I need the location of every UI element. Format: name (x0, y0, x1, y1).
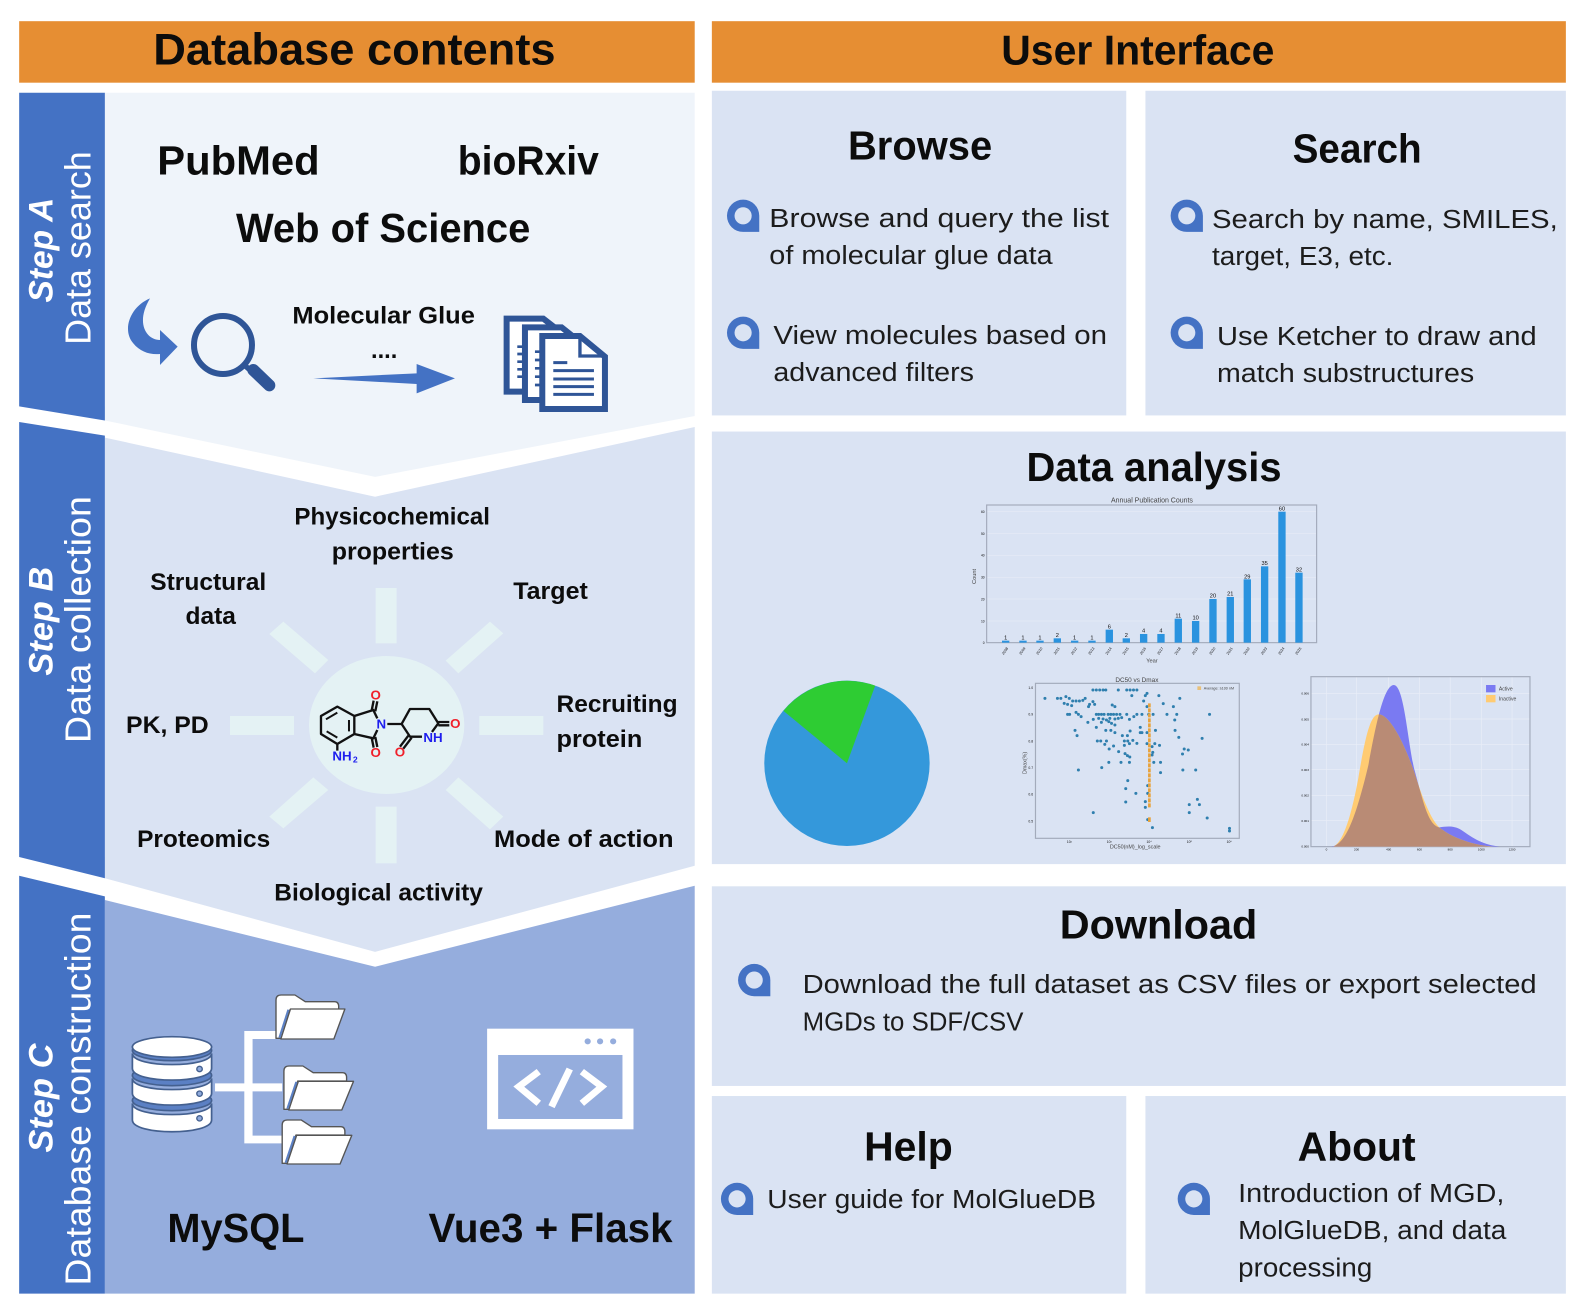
label: Physicochemical properties (294, 503, 490, 566)
icon: bullet (727, 200, 759, 232)
density plot: active vs inactive: Inactive (1499, 697, 1516, 703)
label: Vue3 + Flask: Vue3 + Flask (429, 1205, 673, 1251)
bar chart: annual publication counts: 2019 (1191, 647, 1199, 656)
density plot: active vs inactive: 400 (1386, 847, 1392, 851)
scatter plot: DC50 vs Dmax: 0.6 (1028, 793, 1033, 797)
scatter plot: DC50 vs Dmax: 10⁴ (1146, 840, 1152, 844)
scatter plot: DC50 vs Dmax: 0.7 (1028, 766, 1033, 770)
density plot: active vs inactive: 200 (1354, 847, 1359, 851)
bar chart: annual publication counts: 2009 (1019, 647, 1026, 656)
text: search by name (1212, 206, 1558, 271)
icon: magnifying glass (194, 316, 269, 385)
bar chart: annual publication counts: 2008 (1001, 647, 1009, 656)
bar chart: annual publication counts: 2022 (1243, 647, 1251, 656)
label: Structural data: Structural (150, 569, 266, 596)
scatter plot: DC50 vs Dmax (1022, 677, 1239, 850)
scatter plot: DC50 vs Dmax: 10² (1067, 840, 1073, 844)
arrow (313, 364, 455, 393)
heading: Search: Search (1293, 125, 1422, 171)
scatter plot: DC50 vs Dmax: DC50 vs Dmax (1115, 677, 1159, 684)
bar chart: annual publication counts: Count (972, 568, 978, 584)
panel: Data analysis (712, 432, 1566, 864)
bar chart: annual publication counts: 10 (981, 619, 985, 623)
scatter plot: DC50 vs Dmax: 1.0 (1028, 686, 1033, 690)
density plot: active vs inactive: 1000 (1478, 847, 1485, 851)
heading: Data analysis: Data analysis (1026, 444, 1282, 490)
label: Structural data (150, 569, 266, 630)
step B background (105, 427, 695, 952)
molecule: pomalidomide: N (376, 717, 386, 732)
density plot: active vs inactive: 0.003 (1301, 768, 1309, 772)
bar chart: annual publication counts: 2020 (1209, 647, 1216, 656)
bar chart: annual publication counts: 50 (981, 532, 985, 536)
text: Ketcher: match substructures (1217, 360, 1474, 388)
step A background (105, 93, 695, 477)
text: download description: MGDs to SDF/CSV (803, 1008, 1024, 1036)
step C side strip: Database construction (58, 913, 99, 1286)
database and web icons (132, 995, 633, 1164)
step C background (105, 886, 695, 1294)
keyword: Molecular Glue: Molecular Glue (292, 303, 475, 330)
label: Mode of action: Mode of action (494, 826, 674, 853)
text: download description: Download the full dataset as CSV files or export selected (803, 971, 1537, 999)
header: Database contents: Database contents (153, 26, 556, 75)
icon: folder middle (284, 1066, 353, 1110)
pie chart (764, 681, 930, 846)
scatter plot: DC50 vs Dmax: Dmax(%) (1022, 752, 1028, 774)
bar chart: annual publication counts: 29 (1244, 574, 1250, 580)
scatter plot: DC50 vs Dmax: 0.9 (1028, 713, 1033, 717)
step B side strip: Step B (22, 567, 60, 676)
rays (230, 588, 543, 863)
label: Target: Target (513, 578, 588, 605)
density plot: active vs inactive: 0.005 (1301, 717, 1309, 721)
scatter plot: DC50 vs Dmax: 10⁵ (1187, 840, 1192, 844)
central circle (309, 656, 464, 794)
panel: Step C database construction (19, 876, 695, 1294)
bar chart: annual publication counts: 2023 (1260, 647, 1268, 656)
scatter plot: DC50 vs Dmax: 10⁶ (1227, 840, 1232, 844)
radial diagram with molecule (230, 588, 543, 863)
bar chart: annual publication counts: Annual Publication Counts (1111, 498, 1193, 505)
label: Proteomics: Proteomics (137, 826, 270, 853)
bar chart: annual publication counts: 1 (1073, 635, 1076, 641)
density plot: active vs inactive: 0 (1326, 847, 1328, 851)
ellipsis: .... (371, 337, 397, 364)
molecule: pomalidomide: O (395, 744, 405, 759)
density plot: active vs inactive: 0.004 (1301, 743, 1309, 747)
density plot: active vs inactive: 600 (1417, 847, 1422, 851)
icon: folder top (276, 995, 345, 1039)
bar chart: annual publication counts: 4 (1142, 629, 1145, 635)
source: PubMed: PubMed (157, 137, 320, 183)
step B side strip: Data collection (58, 496, 99, 743)
bar chart: annual publication counts: 60 (1279, 506, 1285, 512)
icon: database (132, 1037, 212, 1132)
scatter plot: DC50 vs Dmax: 10³ (1107, 840, 1112, 844)
molecule: pomalidomide: NH (423, 730, 443, 745)
text: filters (773, 322, 1107, 387)
bar chart: annual publication counts (972, 498, 1317, 665)
molecule: pomalidomide: O (370, 688, 381, 703)
panel: Step B data collection (19, 422, 695, 952)
density plot: active vs inactive: 0.000 (1301, 844, 1309, 848)
label: Structural data: data (186, 603, 236, 630)
label: PK, PD: PK, PD (126, 712, 209, 739)
icon: bullet (1178, 1183, 1210, 1215)
bar chart: annual publication counts: 2021 (1226, 647, 1234, 656)
heading: Help: Help (864, 1124, 953, 1170)
header: Database contents (19, 21, 695, 83)
panel: Browse (712, 91, 1126, 415)
bar chart: annual publication counts: 32 (1296, 567, 1302, 573)
bar chart: annual publication counts: 40 (981, 554, 985, 558)
icon: bullet (721, 1183, 753, 1215)
text: about description: processing (1238, 1255, 1372, 1283)
density plot: active vs inactive: 800 (1448, 847, 1453, 851)
label: MySQL: MySQL (167, 1205, 305, 1251)
density plot: active vs inactive: 0.001 (1301, 819, 1309, 823)
header: User Interface: User Interface (1001, 28, 1274, 74)
density plot: active vs inactive: 1200 (1509, 847, 1516, 851)
source: bioRxiv: bioRxiv (458, 137, 599, 183)
panel: Search (1145, 91, 1566, 415)
bar chart: annual publication counts: 30 (981, 576, 985, 580)
bar chart: annual publication counts: 2011 (1053, 647, 1061, 655)
bar chart: annual publication counts: 2017 (1157, 647, 1164, 656)
bar chart: annual publication counts: 2018 (1174, 647, 1182, 656)
bar chart: annual publication counts: 21 (1227, 592, 1233, 598)
panel: Download (712, 886, 1566, 1086)
bar chart: annual publication counts: 1 (1038, 635, 1042, 641)
scatter plot: DC50 vs Dmax: Average: ≥100 nM (1204, 686, 1234, 690)
density plot: active vs inactive: 0.006 (1301, 692, 1309, 696)
panel: Help (712, 1096, 1126, 1294)
step A side strip: Step A (22, 198, 60, 302)
heading: About: About (1298, 1124, 1416, 1170)
text: filters: View molecules based on (773, 322, 1107, 350)
header: User Interface (712, 21, 1566, 83)
label: Physicochemical properties: properties (332, 539, 454, 566)
density plot: active vs inactive (1301, 677, 1530, 851)
step A side strip (19, 93, 105, 420)
bar chart: annual publication counts: 10 (1192, 616, 1199, 622)
bar chart: annual publication counts: 1 (1090, 635, 1094, 641)
text: user guide: User guide for MolGlueDB (767, 1186, 1096, 1214)
bar chart: annual publication counts: 60 (981, 510, 985, 514)
text: download description (803, 971, 1537, 1036)
text: browse list: Browse and query the list (769, 205, 1109, 233)
icon: curved arrow (128, 298, 178, 365)
label: Biological activity: Biological activity (274, 879, 484, 906)
molecule: pomalidomide: O (450, 716, 460, 731)
text: about description (1238, 1180, 1507, 1283)
bar chart: annual publication counts: 2013 (1088, 647, 1095, 656)
panel: Step A data search (19, 93, 695, 477)
bar chart: annual publication counts: 2024 (1277, 647, 1285, 656)
bar chart: annual publication counts: 20 (1210, 594, 1216, 600)
icon: bullet (1171, 200, 1203, 232)
text: about description: Introduction of MGD, (1238, 1180, 1504, 1208)
scatter plot: DC50 vs Dmax: 0.8 (1028, 739, 1033, 743)
step C side strip: Step C (22, 1042, 60, 1152)
bar chart: annual publication counts: Year (1146, 659, 1158, 665)
bar chart: annual publication counts: 2016 (1139, 647, 1147, 656)
bar chart: annual publication counts: 2025 (1294, 647, 1302, 656)
search icons and documents (128, 298, 605, 409)
step C side strip (19, 876, 105, 1294)
step A side strip: Data search (58, 151, 99, 345)
step B side strip (19, 422, 105, 878)
text: Ketcher (1217, 323, 1537, 388)
bar chart: annual publication counts: 1 (1021, 635, 1025, 641)
scatter plot: DC50 vs Dmax: 0.5 (1028, 819, 1033, 823)
source: Web of Science: Web of Science (236, 205, 530, 251)
molecule: pomalidomide: 2 (353, 755, 358, 765)
text: filters: advanced filters (773, 359, 974, 387)
icon: documents (507, 319, 605, 409)
bar chart: annual publication counts: 0 (983, 641, 985, 645)
icon: browser code window (487, 1029, 633, 1129)
bar chart: annual publication counts: 35 (1261, 561, 1268, 567)
molecule: pomalidomide: O (370, 745, 381, 760)
bar chart: annual publication counts: 20 (981, 597, 985, 601)
heading: Browse: Browse (848, 122, 992, 168)
bar chart: annual publication counts: 2010 (1036, 647, 1043, 656)
molecule: pomalidomide: NH (332, 749, 352, 764)
panel: About (1145, 1096, 1566, 1294)
bar chart: annual publication counts: 2015 (1122, 647, 1130, 656)
bar chart: annual publication counts: 2 (1056, 633, 1059, 639)
label: Physicochemical properties: Physicochemical (294, 503, 490, 530)
label: Recruiting protein: protein (557, 726, 642, 753)
text: search by name: target, E3, etc. (1212, 243, 1393, 271)
density plot: active vs inactive: Active (1499, 687, 1513, 693)
icon: bullet (1171, 317, 1203, 349)
bar chart: annual publication counts: 11 (1175, 613, 1181, 619)
text: search by name: Search by name, SMILES, (1212, 206, 1558, 234)
icon: bullet (738, 964, 770, 996)
molecule: pomalidomide (321, 688, 460, 765)
bar chart: annual publication counts: 4 (1159, 629, 1163, 635)
icon: bullet (727, 317, 759, 349)
label: Recruiting protein (557, 691, 678, 753)
bar chart: annual publication counts: 6 (1108, 624, 1111, 630)
text: Ketcher: Use Ketcher to draw and (1217, 323, 1537, 351)
label: Recruiting protein: Recruiting (557, 691, 678, 718)
bar chart: annual publication counts: 1 (1004, 635, 1007, 641)
density plot: active vs inactive: 0.002 (1301, 794, 1309, 798)
bar chart: annual publication counts: 2012 (1070, 647, 1078, 656)
text: browse list (769, 205, 1109, 270)
bar chart: annual publication counts: 2 (1125, 633, 1128, 639)
text: browse list: of molecular glue data (769, 242, 1053, 270)
connector tree (215, 1031, 282, 1143)
bar chart: annual publication counts: 2014 (1105, 647, 1113, 656)
scatter plot: DC50 vs Dmax: DC50(nM)_log_scale (1110, 844, 1161, 850)
heading: Download: Download (1060, 902, 1257, 948)
icon: folder bottom (282, 1120, 352, 1164)
text: about description: MolGlueDB, and data (1238, 1217, 1507, 1245)
